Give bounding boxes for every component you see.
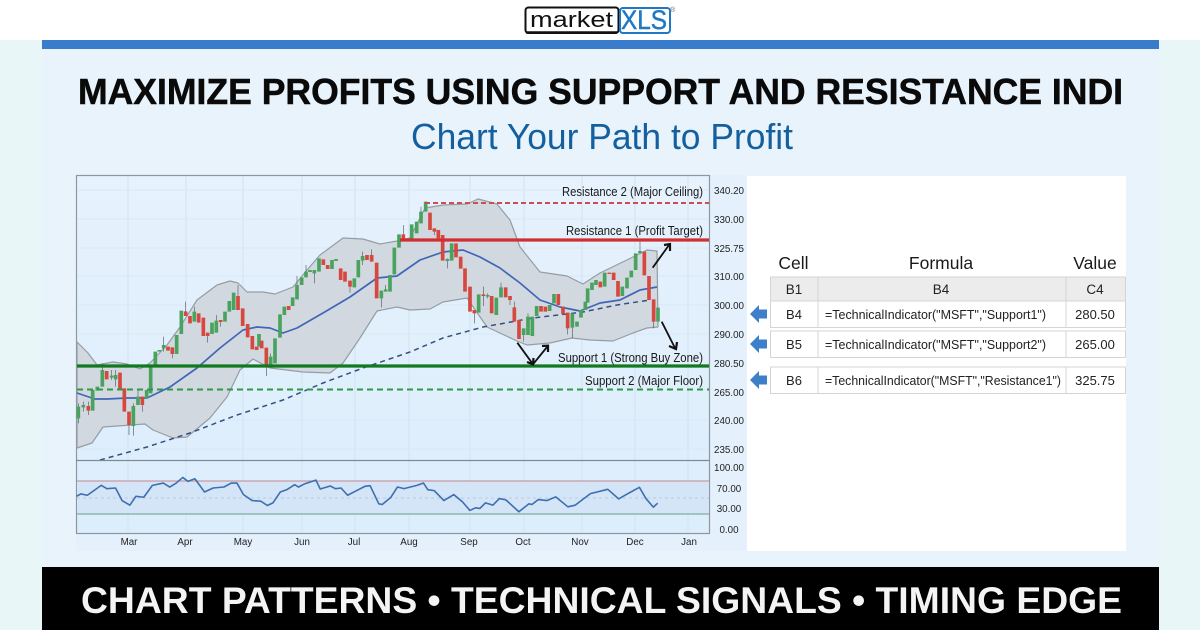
table row: Support1: 280.50 xyxy=(1075,307,1115,322)
icon: arrow to Support1 row xyxy=(750,305,767,323)
RSI axis labels: 0.00 xyxy=(719,525,739,536)
table row: Support2 xyxy=(770,331,1126,358)
table row: Resistance1 xyxy=(770,367,1126,394)
month axis labels: Nov xyxy=(571,537,589,548)
label: resistance 2: Resistance 2 (Major Ceiling) xyxy=(562,185,703,199)
logo: marketXLS: market xyxy=(530,7,613,32)
table row: Resistance1: =TechnicalIndicator("MSFT","Resistance1") xyxy=(825,373,1061,388)
support 1 line xyxy=(77,364,709,368)
arrow: drop to support xyxy=(662,322,677,349)
month axis labels: Aug xyxy=(400,537,418,548)
table row: Support1 xyxy=(770,301,1126,328)
panel: formula table xyxy=(747,176,1126,551)
month axis labels: May xyxy=(234,537,252,548)
table header row: B1 xyxy=(786,282,802,297)
support 2 line xyxy=(77,388,709,390)
top accent bar xyxy=(42,40,1159,49)
RSI axis labels: 70.00 xyxy=(717,484,742,495)
table column headings: Value xyxy=(1073,253,1117,273)
table header row xyxy=(770,277,1126,301)
icon: arrow to Resistance1 row xyxy=(750,371,767,389)
long-term dashed average xyxy=(100,300,650,460)
month axis labels: Jul xyxy=(348,537,360,548)
RSI axis labels: 30.00 xyxy=(717,504,742,515)
month axis labels xyxy=(121,537,697,548)
table header row: C4 xyxy=(1086,282,1104,297)
table row: Support2: B5 xyxy=(786,337,802,352)
price axis labels xyxy=(714,186,745,456)
label: resistance 1: Resistance 1 (Profit Target) xyxy=(566,224,703,238)
table column headings xyxy=(778,253,1117,273)
month axis labels: Oct xyxy=(515,537,531,548)
month axis labels: Apr xyxy=(177,537,193,548)
table row: Support2: 265.00 xyxy=(1075,337,1115,352)
price axis labels: 240.00 xyxy=(714,416,745,427)
RSI line xyxy=(77,477,658,512)
label: support 2: Support 2 (Major Floor) xyxy=(585,374,703,388)
price axis labels: 265.00 xyxy=(714,388,745,399)
table row: Support2: =TechnicalIndicator("MSFT","Support2") xyxy=(825,337,1046,352)
icon: arrow to Support2 row xyxy=(750,335,767,353)
table row: Resistance1: 325.75 xyxy=(1075,373,1115,388)
title: MAXIMIZE PROFITS USING SUPPORT AND RESISTANCE INDI xyxy=(78,71,1123,112)
price axis labels: 235.00 xyxy=(714,445,745,456)
month axis labels: Dec xyxy=(626,537,644,548)
main panel xyxy=(42,49,1159,567)
panel: stock chart xyxy=(76,175,747,551)
table row: Resistance1: B6 xyxy=(786,373,802,388)
RSI axis labels: 100.00 xyxy=(714,463,745,474)
resistance 2 line xyxy=(425,202,709,204)
month axis labels: Sep xyxy=(460,537,478,548)
price axis labels: 340.20 xyxy=(714,186,745,197)
moving average xyxy=(77,250,657,399)
chart grid lines xyxy=(128,176,688,533)
month axis labels: Jan xyxy=(681,537,697,548)
resistance 1 line xyxy=(400,238,709,242)
footer band xyxy=(42,567,1159,630)
logo: marketXLS: XLS xyxy=(621,5,667,35)
month axis labels: Jun xyxy=(294,537,310,548)
price axis labels: 325.75 xyxy=(714,244,745,255)
logo: marketXLS: ® xyxy=(670,6,676,14)
table column headings: Cell xyxy=(778,253,809,273)
price axis labels: 310.00 xyxy=(714,272,745,283)
label: support 1: Support 1 (Strong Buy Zone) xyxy=(558,351,703,365)
arrow: touch support 1 xyxy=(517,343,548,364)
price axis labels: 280.50 xyxy=(714,359,745,370)
candlesticks xyxy=(78,202,658,436)
arrow: bounce up to resistance xyxy=(653,244,670,268)
price axis labels: 290.00 xyxy=(714,330,745,341)
month axis labels: Mar xyxy=(121,537,138,548)
table row: Support1: B4 xyxy=(786,307,802,322)
table row: Support1: =TechnicalIndicator("MSFT","Support1") xyxy=(825,307,1046,322)
bollinger band xyxy=(77,199,658,448)
RSI axis labels xyxy=(714,463,745,536)
logo: marketXLS xyxy=(526,5,676,35)
RSI sub-chart xyxy=(76,460,709,514)
price axis labels: 330.00 xyxy=(714,215,745,226)
price axis labels: 300.00 xyxy=(714,301,745,312)
table column headings: Formula xyxy=(909,253,973,273)
table header row: B4 xyxy=(933,282,950,297)
subtitle: Chart Your Path to Profit xyxy=(411,116,793,157)
footer text: CHART PATTERNS • TECHNICAL SIGNALS • TIMING EDGE xyxy=(81,580,1122,621)
